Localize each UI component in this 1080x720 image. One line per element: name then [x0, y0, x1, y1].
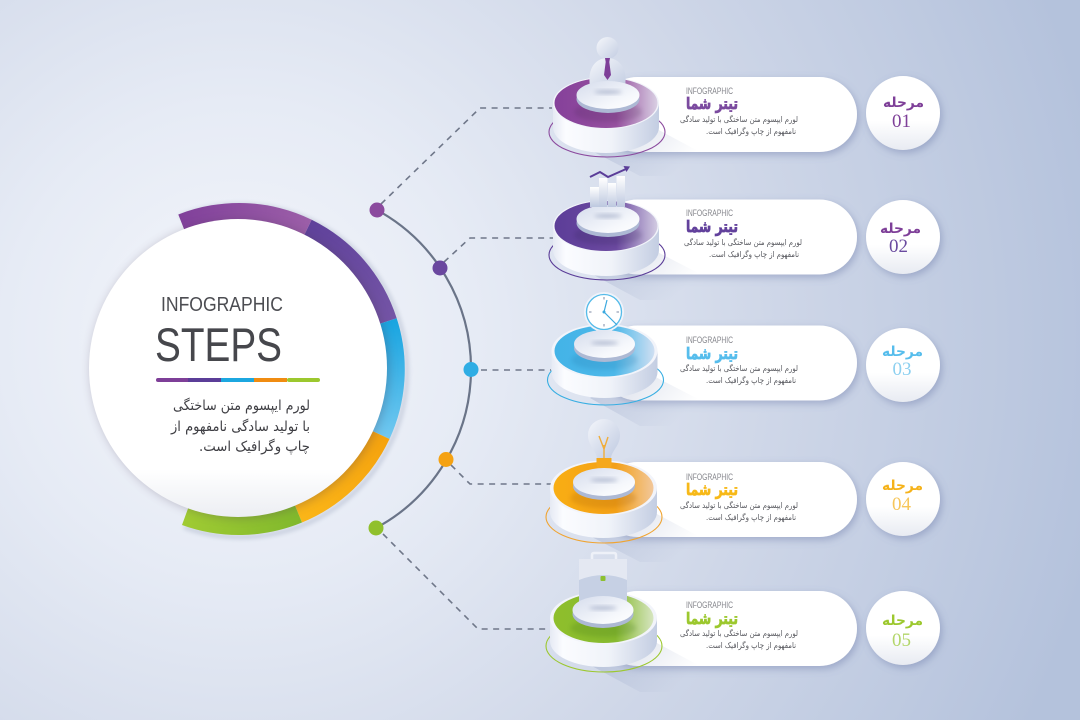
long shadow: [590, 243, 700, 300]
platform: [546, 460, 662, 543]
ring segment: green: [182, 369, 302, 535]
step badge: مرحله: [882, 478, 923, 494]
description: نامفهوم از چاپ وگرافیک است.: [706, 375, 796, 385]
title: تیتر شما: [686, 609, 738, 628]
description: نامفهوم از چاپ وگرافیک است.: [709, 249, 799, 259]
colour bar: [156, 378, 320, 382]
step 5: [546, 553, 940, 692]
heading: INFOGRAPHIC: INFOGRAPHIC: [161, 294, 283, 316]
body text: با تولید سادگی نامفهوم از: [170, 418, 310, 435]
icon: briefcase: [579, 553, 627, 605]
pill panel: [600, 200, 857, 274]
label: INFOGRAPHIC: [686, 208, 733, 218]
label: INFOGRAPHIC: [686, 472, 733, 482]
description: [680, 628, 798, 650]
body text: لورم ایپسوم متن ساختگی: [173, 397, 310, 414]
disc: [573, 468, 635, 500]
pill panel: [600, 591, 857, 666]
disc: [572, 596, 634, 628]
icon: person: [589, 37, 626, 86]
step badge: 05: [892, 630, 911, 651]
body text: چاپ وگرافیک است.: [199, 438, 310, 455]
description: لورم ایپسوم متن ساختگی با تولید سادگی: [680, 500, 798, 510]
pill panel: [600, 462, 857, 537]
step 4: [546, 419, 940, 562]
title: تیتر شما: [686, 217, 738, 236]
body text: [170, 397, 310, 455]
pill panel: [600, 326, 857, 400]
circle inner shadow: [91, 220, 389, 518]
disc: [576, 81, 640, 113]
platform: [546, 592, 662, 672]
disc: [574, 330, 635, 362]
long shadow: [590, 505, 700, 562]
icon: clock: [584, 292, 624, 332]
platform: [549, 200, 665, 280]
description: لورم ایپسوم متن ساختگی با تولید سادگی: [680, 363, 798, 373]
heading: STEPS: STEPS: [155, 318, 282, 371]
disc: [576, 205, 640, 237]
description: [680, 114, 798, 136]
description: [684, 237, 802, 259]
description: نامفهوم از چاپ وگرافیک است.: [706, 512, 796, 522]
step badge: مرحله: [882, 613, 923, 629]
platform: [548, 324, 664, 405]
white circle: [89, 219, 387, 517]
step 2: [549, 166, 940, 300]
central circle with progress ring: [89, 203, 407, 537]
step badge: 02: [889, 236, 908, 257]
ring segment: orange: [239, 369, 390, 522]
step badge: 04: [892, 494, 912, 515]
ring segment: purple: [178, 203, 312, 369]
step badge: 03: [892, 359, 912, 380]
description: [680, 500, 798, 522]
step 1: [549, 37, 940, 176]
description: لورم ایپسوم متن ساختگی با تولید سادگی: [680, 628, 798, 638]
step badge: مرحله: [883, 95, 924, 111]
label: INFOGRAPHIC: [686, 600, 733, 610]
step badge: [866, 200, 940, 274]
long shadow: [590, 369, 700, 426]
description: نامفهوم از چاپ وگرافیک است.: [706, 126, 796, 136]
icon: light bulb: [588, 419, 620, 472]
description: لورم ایپسوم متن ساختگی با تولید سادگی: [680, 114, 798, 124]
ring segment: blue: [239, 318, 405, 439]
connector dots: [368, 202, 478, 536]
description: نامفهوم از چاپ وگرافیک است.: [706, 640, 796, 650]
ring shadow: [180, 205, 407, 537]
title: تیتر شما: [686, 480, 738, 499]
title: تیتر شما: [686, 94, 738, 113]
long shadow: [590, 120, 700, 176]
step 3: [548, 292, 940, 426]
description: لورم ایپسوم متن ساختگی با تولید سادگی: [684, 237, 802, 247]
description: [680, 363, 798, 385]
platform: [549, 77, 665, 157]
label: INFOGRAPHIC: [686, 335, 733, 345]
step badge: [866, 328, 940, 402]
step badge: مرحله: [882, 344, 923, 360]
title: تیتر شما: [686, 344, 738, 363]
step badge: [866, 76, 940, 150]
dashed connectors: [381, 108, 553, 629]
icon: growth chart: [590, 166, 630, 207]
step badge: 01: [892, 111, 911, 132]
step badge: [866, 591, 940, 665]
step badge: [866, 462, 940, 536]
long shadow: [590, 634, 700, 692]
pill panel: [600, 77, 857, 152]
label: INFOGRAPHIC: [686, 86, 733, 96]
connector arc: [376, 210, 471, 528]
ring segment: dark purple: [239, 220, 397, 369]
step badge: مرحله: [880, 221, 921, 237]
